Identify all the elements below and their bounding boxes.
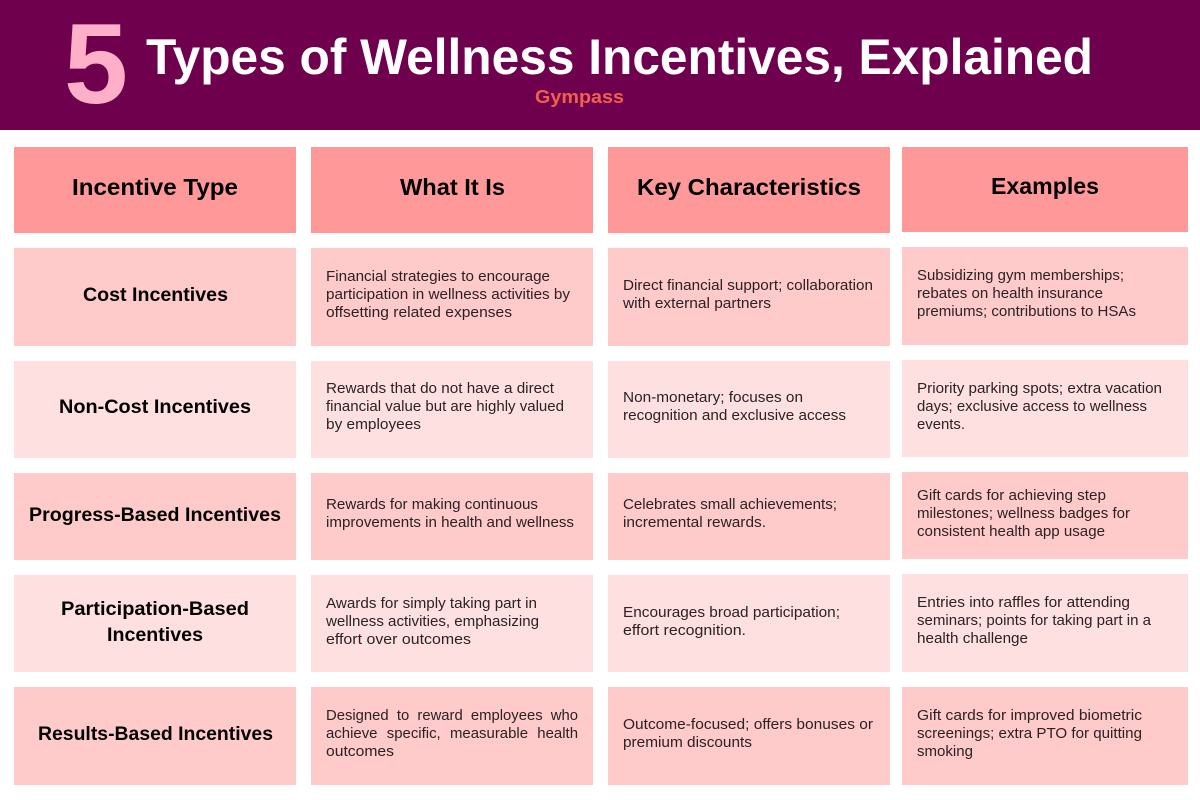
- brand: Gympass: Gympass: [535, 87, 624, 107]
- row 3 characteristics: Celebrates small achievements;: [623, 497, 837, 513]
- row 4 examples: seminars; points for taking part in a: [917, 613, 1152, 629]
- row 4 type: Participation-Based Incentives: [14, 575, 296, 672]
- row 5 examples: Gift cards for improved biometric: [917, 708, 1142, 724]
- row 5 characteristics: [608, 687, 890, 785]
- row 4 what it is: [311, 575, 593, 672]
- row 2 characteristics: Non-monetary; focuses on: [623, 390, 803, 406]
- row 2 type: Non-Cost Incentives: [14, 361, 296, 458]
- row 5 examples: [902, 687, 1188, 785]
- row 4 characteristics: effort recognition.: [623, 623, 746, 639]
- row 2 what it is: financial value but are highly valued: [326, 399, 564, 415]
- row 4 type: Participation-Based Incentives: Incentives: [107, 624, 203, 646]
- row 3 characteristics: [608, 473, 890, 560]
- title banner: [0, 0, 1200, 130]
- title: Types of Wellness Incentives, Explained: [146, 29, 1093, 85]
- row 3 type: Progress-Based Incentives: [14, 473, 296, 560]
- row 5 examples: smoking: [917, 744, 973, 760]
- row 5 characteristics: Outcome-focused; offers bonuses or: [623, 717, 873, 733]
- row 2 what it is: [311, 361, 593, 458]
- row 2 characteristics: recognition and exclusive access: [623, 408, 846, 424]
- header: What It Is: What It Is: [400, 174, 505, 200]
- header: Key Characteristics: Key Characteristics: [637, 174, 861, 200]
- row 2 examples: events.: [917, 417, 965, 433]
- row 3 examples: consistent health app usage: [917, 524, 1105, 540]
- row 4 characteristics: Encourages broad participation;: [623, 605, 840, 621]
- row 1 what it is: [311, 248, 593, 346]
- row 5 type: Results-Based Incentives: Results-Based Incentives: [38, 723, 273, 745]
- row 3 type: Progress-Based Incentives: Progress-Based Incentives: [29, 504, 281, 526]
- header: Examples: Examples: [991, 173, 1099, 199]
- header: Incentive Type: [14, 147, 296, 233]
- row 1 type: Cost Incentives: Cost Incentives: [83, 284, 228, 306]
- row 3 characteristics: incremental rewards.: [623, 515, 766, 531]
- row 2 examples: days; exclusive access to wellness: [917, 399, 1147, 415]
- row 1 examples: Subsidizing gym memberships;: [917, 268, 1124, 284]
- row 2 characteristics: [608, 361, 890, 458]
- header: Key Characteristics: [608, 147, 890, 233]
- header: Examples: [902, 147, 1188, 232]
- row 1 characteristics: Direct financial support; collaboration: [623, 278, 873, 294]
- row 5 type: Results-Based Incentives: [14, 687, 296, 785]
- row 5 characteristics: premium discounts: [623, 735, 752, 751]
- row 1 what it is: offsetting related expenses: [326, 305, 512, 321]
- header: What It Is: [311, 147, 593, 233]
- row 2 examples: [902, 360, 1188, 457]
- row 1 what it is: participation in wellness activities by: [326, 287, 571, 303]
- row 4 examples: health challenge: [917, 631, 1028, 647]
- row 4 examples: [902, 574, 1188, 672]
- row 2 what it is: Rewards that do not have a direct: [326, 381, 554, 397]
- row 1 type: Cost Incentives: [14, 248, 296, 346]
- row 1 characteristics: [608, 248, 890, 346]
- row 4 what it is: Awards for simply taking part in: [326, 596, 537, 612]
- row 4 what it is: effort over outcomes: [326, 632, 471, 648]
- row 5 what it is: achieve specific, measurable health: [326, 726, 578, 742]
- row 3 examples: milestones; wellness badges for: [917, 506, 1130, 522]
- header: Incentive Type: Incentive Type: [72, 174, 238, 200]
- row 5 what it is: Designed to reward employees who: [326, 708, 578, 724]
- row 3 what it is: Rewards for making continuous: [326, 497, 538, 513]
- row 5 what it is: outcomes: [326, 744, 394, 760]
- row 2 what it is: by employees: [326, 417, 421, 433]
- row 3 examples: [902, 472, 1188, 559]
- row 4 examples: Entries into raffles for attending: [917, 595, 1130, 611]
- row 3 examples: Gift cards for achieving step: [917, 488, 1106, 504]
- row 1 examples: premiums; contributions to HSAs: [917, 304, 1136, 320]
- row 5 examples: screenings; extra PTO for quitting: [917, 726, 1142, 742]
- row 4 type: Participation-Based Incentives: Participation-Based: [61, 598, 249, 620]
- row 2 examples: Priority parking spots; extra vacation: [917, 381, 1162, 397]
- row 3 what it is: [311, 473, 593, 560]
- row 4 characteristics: [608, 575, 890, 672]
- row 1 what it is: Financial strategies to encourage: [326, 269, 550, 285]
- row 4 what it is: wellness activities, emphasizing: [325, 614, 539, 630]
- row 1 characteristics: with external partners: [622, 296, 771, 312]
- row 1 examples: rebates on health insurance: [917, 286, 1103, 302]
- row 1 examples: [902, 247, 1188, 345]
- big number 5: 5: [64, 1, 128, 128]
- row 2 type: Non-Cost Incentives: Non-Cost Incentives: [59, 396, 251, 418]
- row 3 what it is: improvements in health and wellness: [326, 515, 574, 531]
- row 5 what it is: [311, 687, 593, 785]
